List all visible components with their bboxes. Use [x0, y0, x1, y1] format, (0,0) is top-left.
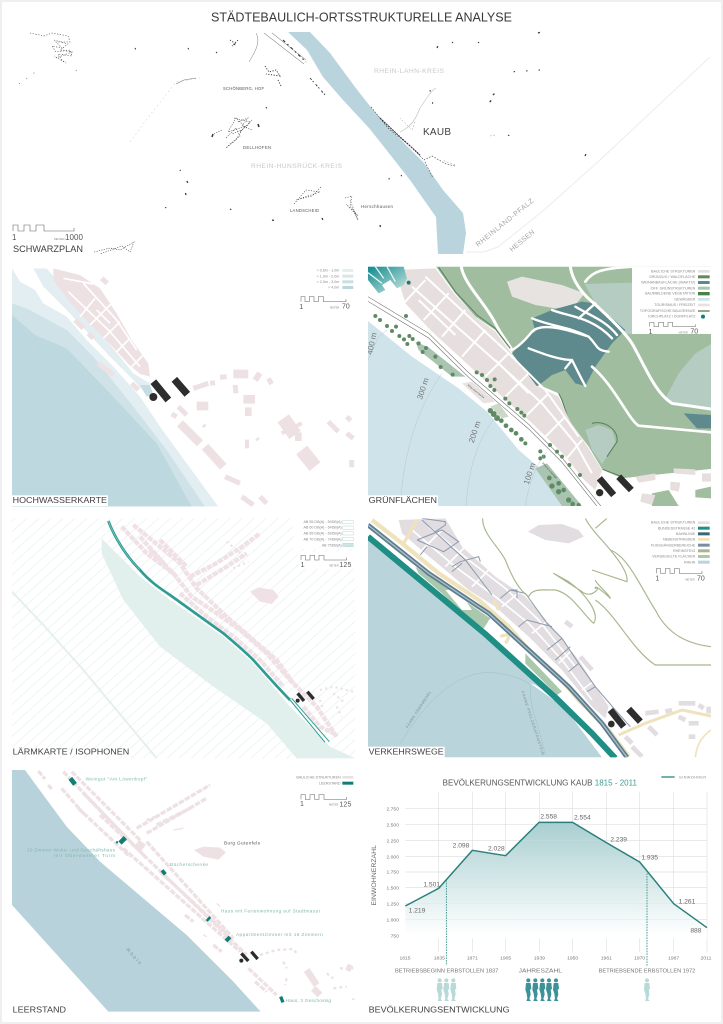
data values: 2.558 [540, 813, 557, 820]
legend: BAHNLINIE [676, 532, 696, 536]
event labels: BETRIEBSENDE ERBSTOLLEN 1972 [599, 969, 695, 975]
scale bar: 1 [301, 562, 305, 569]
castle outline [507, 277, 585, 308]
buildings [38, 771, 353, 1000]
legend [651, 521, 710, 564]
rail and road [368, 297, 603, 508]
legend: NEBENSTRASSEN [663, 538, 696, 542]
rhine water [12, 770, 261, 1012]
panel: schwarzplan: KAUB [423, 127, 451, 138]
shore strip [368, 537, 615, 758]
heading: LEERSTAND [13, 1005, 66, 1014]
sealed surfaces [415, 567, 562, 695]
light green structures [585, 283, 711, 464]
kaub settlement [380, 118, 420, 155]
title: STÄDTEBAULICH-ORTSSTRUKTURELLE ANALYSE [211, 10, 512, 24]
panel: verkehrswege: FÄHRE PFALZGRAFENSTEIN [520, 691, 545, 756]
scale bar [300, 795, 351, 808]
y axis values: 2.250 [387, 838, 399, 844]
faint isophone band [12, 592, 157, 758]
federal road [108, 521, 329, 742]
scale bar: 1 [12, 233, 17, 242]
line chart [372, 792, 712, 966]
scale bar: METER [54, 237, 65, 241]
panel: schwarzplan: RHEIN-HUNSRÜCK-KREIS [251, 162, 343, 170]
legend: AB 65 DB(A) - 69DB(A) [303, 532, 342, 536]
forest green area [436, 267, 711, 478]
x axis years: 1961 [601, 956, 612, 962]
vacancy labels: Haus mit Ferienwohnung auf Stadtmauer [221, 909, 321, 914]
scale bar: METER [679, 331, 688, 335]
legend: > 1,0m - 2,0m [317, 274, 339, 278]
data values: 1.935 [641, 854, 658, 861]
panel: schwarzplan: RHEIN-LAHN-KREIS [374, 68, 445, 75]
railway [368, 525, 627, 757]
scale bar: METER [330, 306, 339, 310]
riverside plots: Rhein-Lounge [541, 461, 558, 480]
legend: KIRCHPLATZ / DORFPLATZ [648, 315, 696, 319]
data values: 1.501 [423, 881, 440, 888]
y axis values: 1.750 [387, 870, 399, 876]
chart title: BEVÖLKERUNGSENTWICKLUNG KAUB 1815 - 2011 [443, 779, 638, 788]
x axis years: 1950 [567, 956, 578, 962]
heading: LÄRMKARTE / ISOPHONEN [13, 747, 130, 756]
event labels: BETRIEBSBEGINN ERBSTOLLEN 1837 [395, 969, 498, 975]
castle outline [528, 524, 584, 543]
scale bar: 125 [339, 801, 351, 808]
y axis title: EINWOHNERZAHL [372, 844, 378, 906]
scale bar [655, 569, 705, 583]
buildings [392, 268, 602, 490]
pedestrian lanes [417, 518, 630, 727]
vacancy labels: Haus, 3 Geschossig [286, 998, 331, 1003]
flood zones [12, 268, 218, 507]
dense noise band [102, 538, 355, 758]
chart legend: EINWOHNER [679, 776, 706, 780]
state border line [466, 57, 710, 252]
legend: BUNDESSTRASSE 42 [658, 526, 695, 530]
legend: LEERSTAND [319, 781, 341, 785]
scale bar: METER [685, 577, 695, 581]
scale bar: METER [329, 803, 338, 807]
scale bar: 70 [697, 575, 705, 582]
legend: GRÜNZUG / WALDFLÄCHE [649, 275, 696, 279]
buildings [399, 518, 709, 757]
y axis values: 750 [391, 933, 399, 939]
scale bar: 1000 [65, 233, 84, 242]
legend: BAULICHE STRUKTUREN [296, 776, 341, 780]
data values: 2.554 [574, 814, 591, 821]
highlighted buildings [239, 952, 258, 963]
kirchplatz teal [368, 267, 411, 293]
data values: 1.219 [409, 908, 426, 915]
x axis years: 1970 [634, 956, 645, 962]
x axis years: 2011 [701, 956, 712, 962]
legend: BAULICHE STRUKTUREN [651, 521, 696, 525]
event markers [446, 873, 647, 966]
vacancy labels: Bücherschenke [170, 862, 208, 867]
event labels: JAHRESZAHL [519, 969, 562, 975]
scale bar: 70 [690, 329, 698, 336]
data values: 1.261 [679, 899, 696, 906]
legend: AB 55 DB(A) - 59DB(A) [303, 520, 342, 524]
y axis values: 2.750 [387, 806, 399, 812]
ferry labels: FÄHRE OBERWESEL [405, 690, 432, 729]
gridlines [405, 792, 707, 952]
distance labels: 400 m [365, 331, 379, 355]
rhine water [368, 539, 602, 757]
panel: lärmkarte [12, 518, 355, 758]
ferry routes [400, 672, 545, 755]
panel: verkehrswege [368, 518, 711, 758]
highlighted buildings [296, 692, 314, 703]
x axis years: 1905 [500, 956, 511, 962]
castle outline [194, 847, 226, 860]
legend: AB 75DB(A) [322, 543, 342, 547]
scale bar [299, 297, 350, 311]
people: end [644, 978, 650, 1001]
x axis years: 1939 [534, 956, 545, 962]
legend: VERSIEGELTE FLÄCHEN [652, 555, 696, 559]
village east [603, 468, 711, 506]
heading: VERKEHRSWEGE [369, 748, 444, 757]
legend: WEINANBAUFLÄCHE (INAKTIV) [641, 280, 695, 284]
legend: BAULICHE STRUKTUREN [651, 269, 696, 273]
legend: OFF. GRÜNSTRUKTUREN [651, 286, 696, 290]
river label: Rhein [125, 947, 143, 966]
building footprints [19, 32, 587, 254]
vacancy labels [27, 776, 331, 1003]
x axis years: 1871 [467, 956, 478, 962]
scale bar: 125 [339, 562, 351, 569]
panel: schwarzplan: Herschhausen [361, 204, 394, 209]
legend: AB 60 DB(A) - 64DB(A) [303, 526, 342, 530]
distance labels: 100 m [522, 461, 538, 486]
data values: 2.028 [488, 845, 505, 852]
y axis values [387, 806, 399, 939]
y axis values: 1.500 [387, 885, 399, 891]
area fill [405, 822, 707, 938]
panel: hochwasserkarte [12, 268, 353, 507]
buildings [53, 268, 353, 505]
side roads [372, 520, 711, 757]
trees [373, 314, 582, 506]
heading: GRÜNFLÄCHEN [369, 496, 437, 505]
buildings [122, 525, 353, 737]
scale bar: 1 [649, 329, 653, 336]
place labels: SCHÖNBERG, HOF [223, 86, 264, 91]
scale bar [12, 225, 84, 242]
panel: schwarzplan [12, 32, 710, 254]
y axis values: 1.000 [387, 917, 399, 923]
chart legend [661, 776, 706, 780]
riverside plots [415, 342, 582, 506]
legend [293, 519, 355, 549]
panel: schwarzplan: DELLHOFEN [243, 145, 271, 150]
riverside white plots [446, 590, 489, 621]
legend [317, 269, 353, 290]
highlighted buildings [149, 379, 187, 401]
data values: 2.239 [610, 836, 627, 843]
topographic border [439, 267, 622, 477]
panel: bevölkerungsentwicklung [369, 776, 712, 1014]
legend: FUSSGÄNGERBEREICHE [651, 543, 696, 547]
heading: BEVÖLKERUNGSENTWICKLUNG [369, 1005, 510, 1014]
castle outline [250, 587, 279, 604]
data line [405, 822, 707, 928]
legend [632, 267, 711, 334]
scale bar: 1 [299, 304, 303, 311]
scale bar: 70 [342, 304, 350, 311]
legend: TOURISMUS / FREIZEIT [654, 303, 696, 307]
panel: schwarzplan: HESSEN [509, 229, 536, 254]
gridlines over fill [405, 840, 707, 920]
isophone hatch [12, 518, 355, 758]
legend: > 0,6m - 1,0m [317, 269, 339, 273]
legend: TOPOGRAFISCHE BAUGRENZE [640, 309, 696, 313]
legend: RHEINSTEIG [673, 549, 695, 553]
x axis years [399, 956, 712, 962]
y axis values: 2.000 [387, 854, 399, 860]
x axis years: 1815 [399, 956, 411, 962]
vacancy labels: mit Oberweseler Turm [54, 853, 115, 858]
people: year [525, 978, 559, 1001]
scale bar: 1 [655, 576, 659, 583]
heading: HOCHWASSERKARTE [13, 496, 107, 505]
people: start [437, 978, 456, 1001]
scale bar [298, 552, 355, 569]
legend: > 2,0m - 3,0m [317, 280, 339, 284]
highlighted buildings [596, 477, 631, 496]
inactive vineyards [512, 302, 625, 387]
paths through vineyards [461, 267, 711, 432]
heading: SCHWARZPLAN [13, 244, 83, 254]
legend [296, 776, 353, 785]
hiking paths [483, 518, 711, 665]
scale bar [649, 322, 698, 336]
event labels [395, 969, 695, 975]
vacancy labels: Appartmentzimmer mit 16 Zimmern [236, 932, 323, 937]
scale bar: METER [329, 564, 339, 568]
legend: RHEIN [684, 560, 696, 564]
legend: GEWÄSSER [674, 298, 696, 302]
scale bar: 1 [300, 801, 304, 808]
panel: leerstand [12, 770, 353, 1014]
panel: schwarzplan: RHEINLAND-PFALZ [475, 197, 536, 249]
legend: BAUMBILDENE VEGETATION [645, 292, 696, 296]
vacancy labels: 10 Zimmer Wohn- und Geschäftshaus [27, 848, 116, 853]
panel: grünflächen [365, 267, 711, 508]
y axis values: 2.500 [387, 822, 399, 828]
highlighted buildings [608, 709, 640, 727]
vacancy labels: Weingut "Am Löwenkopf" [86, 776, 148, 781]
contour lines [368, 330, 547, 506]
data values [409, 813, 702, 935]
legend: AB 70 DB(A) - 74DB(A) [303, 537, 342, 541]
water [368, 321, 580, 506]
river rhine [288, 32, 466, 254]
x axis years: 1835 [434, 956, 445, 962]
y axis values: 1.250 [387, 901, 399, 907]
legend: > 4,0m [328, 286, 339, 290]
distance labels [365, 331, 538, 486]
x axis years: 1987 [668, 956, 679, 962]
data values: 888 [690, 928, 702, 935]
distance labels: 300 m [415, 376, 431, 401]
data values: 2.098 [453, 842, 470, 849]
castle label: Burg Gutenfels [224, 841, 261, 846]
panel: schwarzplan: LANDSCHEID [290, 208, 319, 213]
vacant buildings [70, 778, 283, 1002]
riverside plots: Rheinterrasse [467, 383, 486, 399]
distance labels: 200 m [467, 420, 483, 444]
